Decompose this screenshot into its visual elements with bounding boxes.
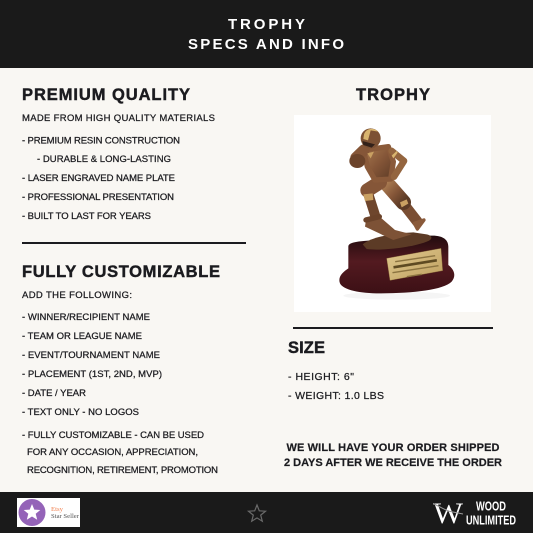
customization list: - TEXT ONLY - NO LOGOS bbox=[22, 407, 139, 418]
wood unlimited logo: UNLIMITED bbox=[466, 514, 516, 528]
add the following: ADD THE FOLLOWING: bbox=[22, 290, 132, 301]
shipping note: WE WILL HAVE YOUR ORDER SHIPPED bbox=[286, 442, 500, 454]
size specs bbox=[288, 371, 384, 402]
wood unlimited logo: WOOD bbox=[476, 498, 506, 514]
customization note: FOR ANY OCCASION, APPRECIATION, bbox=[27, 447, 198, 458]
footer band bbox=[0, 492, 533, 533]
heading: size: SIZE bbox=[288, 339, 325, 357]
football player figure bbox=[349, 128, 424, 240]
header band bbox=[0, 0, 533, 68]
customization note: - FULLY CUSTOMIZABLE - CAN BE USED bbox=[22, 430, 204, 441]
shipping note: 2 DAYS AFTER WE RECEIVE THE ORDER bbox=[284, 457, 502, 469]
feature list: - DURABLE & LONG-LASTING bbox=[37, 154, 171, 165]
header title bbox=[188, 16, 344, 53]
header title: TROPHY bbox=[228, 16, 305, 33]
wood unlimited logo: W bbox=[433, 497, 464, 530]
feature list: - LASER ENGRAVED NAME PLATE bbox=[22, 173, 175, 184]
feature list: - PREMIUM RESIN CONSTRUCTION bbox=[22, 136, 180, 146]
figure pedestal bbox=[363, 232, 431, 250]
shipping note bbox=[284, 442, 502, 469]
size specs: - WEIGHT: 1.0 LBS bbox=[288, 390, 384, 402]
customization note bbox=[22, 430, 218, 476]
customization note: RECOGNITION, RETIREMENT, PROMOTION bbox=[27, 465, 218, 476]
header title: SPECS AND INFO bbox=[188, 36, 344, 53]
trophy base bbox=[339, 236, 454, 293]
panel: premium quality bbox=[22, 86, 215, 222]
heading: trophy: TROPHY bbox=[356, 86, 430, 104]
customization list bbox=[22, 312, 162, 418]
star seller badge: Star Seller bbox=[51, 513, 80, 520]
intro text: MADE FROM HIGH QUALITY MATERIALS bbox=[22, 113, 215, 124]
trophy photo bbox=[294, 115, 491, 312]
feature list: - BUILT TO LAST FOR YEARS bbox=[22, 211, 151, 222]
icon: star outline bbox=[248, 505, 266, 521]
customization list: - WINNER/RECIPIENT NAME bbox=[22, 312, 150, 323]
customization list: - EVENT/TOURNAMENT NAME bbox=[22, 350, 160, 361]
heading: fully customizable: FULLY CUSTOMIZABLE bbox=[22, 263, 220, 281]
panel: fully customizable bbox=[22, 263, 220, 476]
customization list: - TEAM OR LEAGUE NAME bbox=[22, 331, 142, 342]
wood unlimited logo bbox=[433, 497, 516, 530]
star seller badge bbox=[17, 498, 80, 527]
heading: premium quality: PREMIUM QUALITY bbox=[22, 86, 190, 104]
feature list bbox=[22, 136, 180, 222]
feature list: - PROFESSIONAL PRESENTATION bbox=[22, 192, 174, 203]
size specs: - HEIGHT: 6" bbox=[288, 371, 354, 383]
customization list: - DATE / YEAR bbox=[22, 388, 86, 399]
panel: size bbox=[288, 339, 384, 402]
customization list: - PLACEMENT (1ST, 2ND, MVP) bbox=[22, 369, 162, 380]
engraved name plate bbox=[387, 248, 443, 280]
star seller badge: Etsy bbox=[51, 506, 64, 513]
